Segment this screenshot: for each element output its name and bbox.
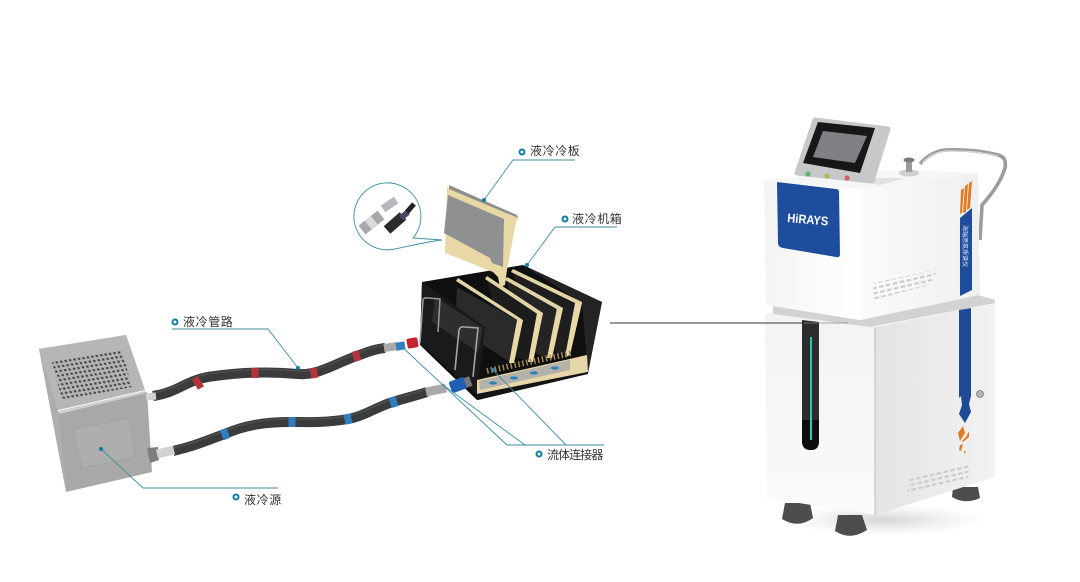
label: hose: 液冷管路 xyxy=(183,314,233,329)
gold base tray xyxy=(477,355,588,394)
blade cards in chassis xyxy=(455,269,582,363)
lower cabinet xyxy=(765,313,875,515)
supply hose xyxy=(153,348,385,396)
fluid connectors xyxy=(395,337,473,393)
blue logo panel: HiRAYS xyxy=(787,211,829,229)
blue logo panel xyxy=(777,182,840,257)
icon: silver connector xyxy=(362,200,396,230)
liquid cooling source box xyxy=(39,335,159,492)
label: cold plate xyxy=(482,143,580,202)
label: source xyxy=(99,447,282,507)
lifted cold plate xyxy=(444,185,518,287)
liquid cooling hoses xyxy=(146,345,446,454)
label: source: 液冷源 xyxy=(244,492,282,507)
orange marks xyxy=(958,426,969,454)
card 4 xyxy=(513,272,576,356)
blue strip xyxy=(959,308,971,423)
wheels xyxy=(782,487,980,536)
card 1 xyxy=(455,287,516,362)
floor shadow xyxy=(785,504,985,536)
card 3 xyxy=(507,281,557,358)
front blanking panel xyxy=(420,282,485,395)
metal ferrules xyxy=(146,396,156,397)
status light slot xyxy=(802,320,819,450)
lower vent xyxy=(907,463,970,495)
blue side strip xyxy=(960,208,972,296)
connector pins row xyxy=(487,353,572,371)
label: chassis xyxy=(525,211,622,267)
label: cold plate: 液冷冷板 xyxy=(530,143,580,158)
label: fluid connector: 流体连接器 xyxy=(547,447,604,462)
return hose xyxy=(173,392,427,451)
upper cabinet xyxy=(764,181,860,320)
divider plate xyxy=(773,295,995,327)
door lock xyxy=(976,390,984,398)
top port xyxy=(899,158,919,176)
handle xyxy=(920,150,1005,240)
icon: top vent holes xyxy=(52,350,132,400)
label: hose xyxy=(172,314,300,370)
blue side strip: 海瑞思氦质谱仪 xyxy=(961,225,969,267)
touch screen xyxy=(797,120,888,181)
label: fluid connector xyxy=(400,345,604,462)
card 2 xyxy=(487,280,537,362)
main machine xyxy=(764,120,1005,536)
orange logo stripes xyxy=(960,181,972,214)
hose bands xyxy=(195,378,201,388)
callout: quick connector zoom xyxy=(354,183,442,250)
liquid cooling chassis xyxy=(420,265,602,400)
upper vent xyxy=(872,269,938,300)
icon: dark connector xyxy=(387,204,414,230)
label: chassis: 液冷机箱 xyxy=(572,211,622,226)
connecting line to machine xyxy=(610,322,848,324)
